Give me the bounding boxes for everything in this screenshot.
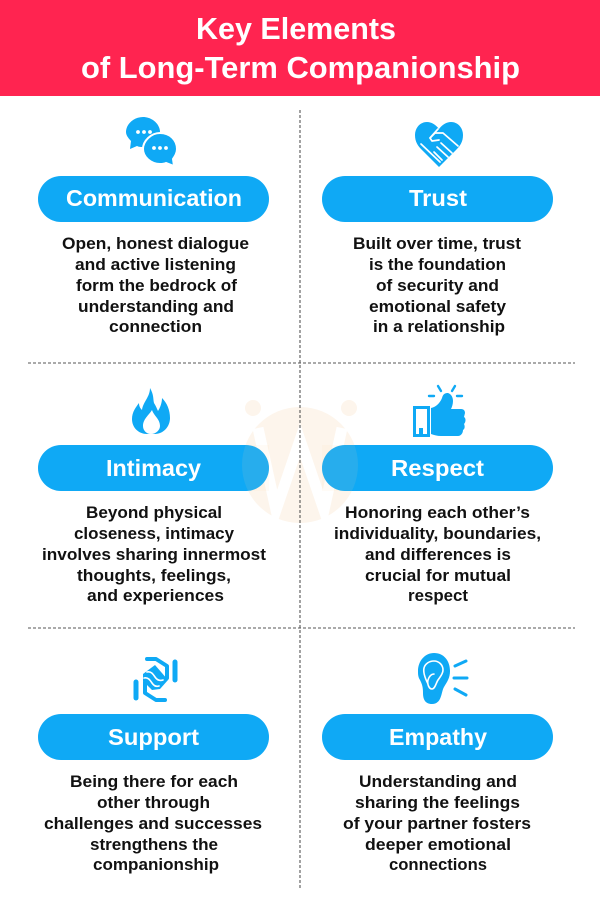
title: Key Elements	[196, 11, 396, 46]
text: intimacy: and experiences	[87, 587, 224, 605]
text: support	[44, 773, 262, 874]
text: trust: emotional safety	[369, 298, 507, 316]
title	[81, 11, 520, 85]
text: respect	[334, 504, 541, 605]
pill: intimacy	[38, 445, 269, 491]
panel: trust	[322, 122, 553, 336]
text: intimacy: involves sharing innermost	[42, 546, 267, 564]
panel: empathy	[322, 653, 553, 874]
text: communication	[62, 235, 249, 336]
text: support: challenges and successes	[44, 815, 262, 833]
text: respect: Honoring each other’s	[345, 504, 530, 522]
text: trust: is the foundation	[369, 256, 506, 274]
text: empathy	[343, 773, 531, 874]
text: support: Being there for each	[70, 773, 238, 791]
icon: ear	[418, 653, 467, 704]
text: support: strengthens the	[90, 836, 218, 854]
text: trust: in a relationship	[373, 318, 505, 336]
icon: handshake heart	[415, 122, 463, 167]
watermark tint on pills	[242, 445, 358, 491]
text: empathy: connections	[389, 856, 487, 874]
text: support: other through	[97, 794, 210, 812]
icon: thumbs up	[413, 386, 466, 437]
text: empathy: of your partner fosters	[343, 815, 531, 833]
panel: support	[38, 659, 269, 874]
text: empathy: sharing the feelings	[355, 794, 520, 812]
pill: empathy	[322, 714, 553, 760]
text: trust: of security and	[376, 277, 499, 295]
heading: intimacy: Intimacy	[106, 455, 201, 481]
text: respect: crucial for mutual	[365, 567, 511, 585]
pill: respect	[322, 445, 553, 491]
text: empathy: Understanding and	[359, 773, 517, 791]
header band	[0, 0, 600, 96]
text: trust	[353, 235, 522, 336]
icon: clasped hands	[136, 659, 175, 700]
text: communication: and active listening	[75, 256, 236, 274]
text: intimacy: thoughts, feelings,	[77, 567, 231, 585]
text: intimacy: closeness, intimacy	[74, 525, 235, 543]
text: communication: connection	[109, 318, 202, 336]
heading: support: Support	[108, 724, 199, 750]
text: communication: understanding and	[78, 298, 234, 316]
watermark	[242, 400, 358, 523]
heading: communication: Communication	[66, 185, 242, 211]
panel: respect	[322, 386, 553, 605]
icon: speech bubbles	[126, 117, 177, 166]
panel: communication	[38, 117, 269, 336]
heading: respect: Respect	[391, 455, 484, 481]
text: respect: respect	[408, 587, 469, 605]
text: communication: Open, honest dialogue	[62, 235, 249, 253]
pill: communication	[38, 176, 269, 222]
text: intimacy	[42, 504, 267, 605]
pill: support	[38, 714, 269, 760]
pill: trust	[322, 176, 553, 222]
text: trust: Built over time, trust	[353, 235, 522, 253]
text: communication: form the bedrock of	[76, 277, 238, 295]
title: of Long-Term Companionship	[81, 50, 520, 85]
text: empathy: deeper emotional	[365, 836, 511, 854]
icon: flame	[132, 388, 170, 434]
text: support: companionship	[93, 856, 219, 874]
heading: trust: Trust	[409, 185, 467, 211]
panel: intimacy	[38, 388, 269, 605]
text: respect: individuality, boundaries,	[334, 525, 541, 543]
heading: empathy: Empathy	[389, 724, 487, 750]
text: respect: and differences is	[365, 546, 511, 564]
text: intimacy: Beyond physical	[86, 504, 222, 522]
